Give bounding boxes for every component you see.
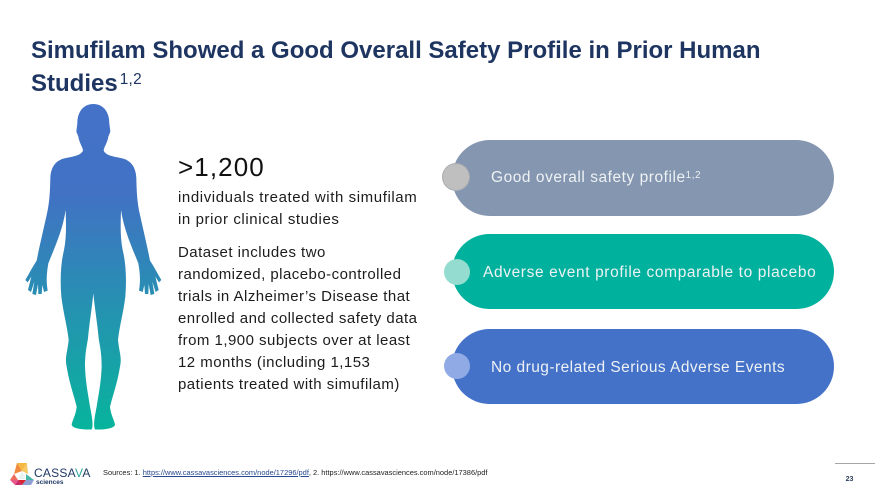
text: individuals treated: individuals treated with simufilam (178, 189, 417, 206)
text: dataset description: trials in Alzheimer’s Disease that (178, 288, 410, 305)
title: Studies1,2 (31, 70, 142, 96)
text: dataset description: Dataset includes two (178, 244, 326, 261)
text: dataset description: enrolled and collected safety data (178, 310, 417, 327)
page number: 23 (846, 476, 853, 483)
footnote: sources: Sources: 1. https://www.cassavasciences.com/node/17296/pdf, 2. https://www.cassavasciences.com/node/17386/pdf (103, 468, 488, 477)
pill label: Adverse event profile comparable to placebo (483, 264, 816, 281)
text: dataset description: randomized, placebo-controlled (178, 266, 401, 283)
logo: Cassava Sciences (10, 463, 91, 486)
text: dataset description: from 1,900 subjects over at least (178, 332, 410, 349)
logo subtext: sciences (36, 479, 63, 486)
pill label: Good overall safety profile1,2 (491, 169, 701, 186)
title (31, 37, 760, 96)
text: dataset description: 12 months (including 1,153 (178, 354, 370, 371)
panel: no serious adverse events (452, 329, 834, 404)
text: individuals treated (178, 189, 417, 228)
pill marker: blue (444, 353, 470, 379)
panel: adverse event profile (452, 234, 834, 309)
panel: good overall safety profile (452, 140, 834, 216)
stat: >1,200: >1,200 (178, 152, 265, 182)
logo wordmark: CASSAVA (34, 466, 91, 480)
pill marker: gray (443, 164, 469, 190)
title: Simufilam Showed a Good Overall Safety Profile in Prior Human (31, 37, 760, 64)
icon: human body silhouette (25, 104, 162, 430)
text: dataset description (178, 244, 417, 393)
text: individuals treated: in prior clinical studies (178, 211, 339, 228)
pill label: No drug-related Serious Adverse Events (491, 359, 785, 376)
pill marker: teal (444, 259, 470, 285)
text: dataset description: patients treated with simufilam) (178, 376, 400, 393)
